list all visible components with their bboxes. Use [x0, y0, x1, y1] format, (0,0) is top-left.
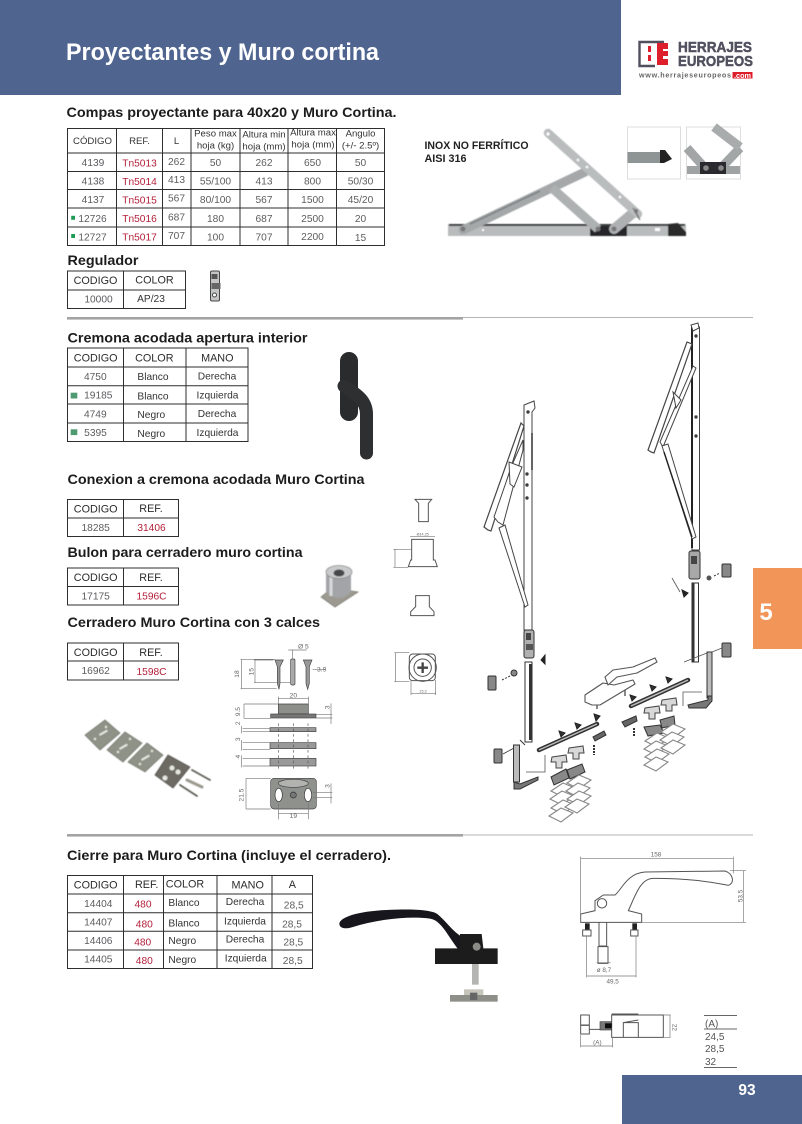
right spacer stacks	[644, 716, 685, 771]
table: compas proyectante: 687	[256, 214, 273, 225]
table: compas proyectante: 4137	[82, 195, 105, 206]
table: conexion	[68, 500, 178, 536]
table: compas proyectante: 100	[207, 232, 224, 244]
logo web address: www.herrajeseuropeos	[638, 70, 731, 80]
drawing: bolt dimensioned: Ø14.25	[417, 533, 429, 537]
table: compas proyectante: 567	[256, 195, 273, 206]
drawing: screws and pin	[234, 643, 327, 689]
logo wordmark: EUROPEOS	[678, 53, 753, 70]
table: bulon: 17175	[82, 592, 110, 602]
table: compas proyectante: 50	[210, 158, 221, 169]
photo inset: stay tip	[628, 127, 680, 179]
table: compas proyectante: 262	[168, 157, 185, 168]
table: cierre: 14407	[84, 917, 113, 928]
table: dimension A: 32	[705, 1057, 717, 1068]
logo wordmark	[678, 39, 753, 70]
table: compas proyectante: REF.	[129, 136, 150, 147]
table: dimension A	[704, 1016, 737, 1068]
icon: regulador part	[210, 271, 220, 301]
table: compas proyectante: 687	[168, 212, 185, 224]
drawing: bracket side: 9.5	[235, 707, 242, 716]
orange chapter tab	[753, 568, 802, 649]
left lower bar and bracket	[514, 662, 545, 789]
table: compas proyectante: 12727	[78, 233, 107, 244]
table: compas proyectante: Angulo	[346, 129, 375, 140]
dimensions: 53,5	[738, 889, 745, 902]
table: compas proyectante: 650	[304, 158, 321, 169]
table: cierre: Izquierda	[224, 916, 266, 927]
table: cremona: Blanco	[137, 372, 169, 383]
table: compas proyectante: 50/30	[348, 176, 374, 187]
drawing: bolt side	[415, 499, 432, 522]
drawing: spacers: 2	[235, 721, 242, 725]
drawing: bracket side	[235, 692, 332, 724]
drawing: screws and pin: Ø 5	[298, 643, 309, 650]
table: compas proyectante: 15	[355, 233, 366, 244]
divider	[67, 317, 753, 320]
table: compas proyectante: 262	[256, 158, 273, 169]
table: compas proyectante: hoja (mm)	[242, 141, 286, 152]
left spacer stacks	[549, 764, 591, 822]
technical drawing: side view	[581, 1014, 678, 1047]
table: dimension A: 24,5	[705, 1032, 725, 1043]
table: bulon: 1596C	[136, 592, 167, 602]
drawing: bracket top: 21.5	[238, 788, 245, 801]
table: cremona: COLOR	[135, 353, 174, 365]
table: cierre: Negro	[168, 936, 197, 947]
right lower bar and bracket	[672, 578, 731, 708]
photo: black window handle	[339, 910, 498, 1002]
table: cerradero: 16962	[82, 666, 110, 677]
drawing: spacers: 3	[235, 737, 242, 741]
logo: Herrajes Europeos	[638, 39, 753, 80]
table: cierre: 480	[134, 937, 152, 948]
table: compas proyectante: 12726	[78, 214, 107, 225]
drawing: bolt top view	[394, 653, 436, 695]
dimensions	[581, 852, 746, 985]
drawing: nut	[411, 596, 434, 616]
table: cierre: COLOR	[166, 879, 204, 891]
table: compas proyectante: 4139	[82, 158, 105, 169]
table: compas proyectante: 1500	[301, 195, 324, 206]
table: cremona	[68, 348, 248, 442]
table: compas proyectante: hoja (kg)	[197, 140, 234, 151]
table: compas proyectante: 707	[256, 232, 273, 244]
logo wordmark: HERRAJES	[678, 39, 752, 56]
table: cerradero	[68, 643, 178, 680]
table: cremona: MANO	[201, 353, 234, 365]
exploded drawing: curtain wall assemblies	[484, 323, 731, 822]
table: cremona: Derecha	[198, 409, 237, 420]
table: cierre: 28,5	[282, 919, 302, 930]
table: cerradero: 1598C	[136, 667, 167, 678]
table: conexion: 31406	[137, 523, 166, 534]
table: cierre: Blanco	[168, 918, 200, 929]
drawing: bracket top	[238, 778, 332, 820]
table: regulador: COLOR	[135, 274, 174, 286]
table: cremona: 5395	[84, 428, 107, 439]
dimensions: 158	[651, 852, 662, 859]
heading: bulon: Bulon para cerradero muro cortina	[68, 544, 303, 560]
photo inset: stay pivot	[686, 127, 740, 179]
table: compas proyectante: 2200	[301, 232, 324, 243]
table: compas proyectante: 413	[168, 175, 185, 186]
table: cremona: Blanco	[137, 392, 169, 403]
photo: compas stay	[448, 132, 686, 236]
table: cierre	[68, 876, 312, 968]
header band	[0, 0, 621, 95]
table: conexion: CODIGO	[74, 504, 118, 516]
heading: cerradero: Cerradero Muro Cortina con 3 calces	[68, 614, 320, 630]
table: cierre: MANO	[231, 879, 264, 891]
table: regulador: CODIGO	[74, 275, 117, 287]
page number: 93	[738, 1082, 756, 1099]
table: compas proyectante: 180	[207, 214, 224, 225]
table: compas proyectante: Tn5015	[122, 196, 157, 206]
table: dimension A: 28,5	[705, 1044, 725, 1055]
table: cierre: Izquierda	[225, 954, 267, 965]
table: cremona: 4749	[84, 409, 107, 420]
table: cerradero: CODIGO	[74, 647, 118, 659]
table: compas proyectante: 45/20	[348, 195, 374, 206]
table: compas proyectante: Tn5016	[122, 214, 157, 225]
table: compas proyectante	[68, 128, 384, 246]
photo: bulon	[321, 566, 358, 607]
table: compas proyectante: 4138	[82, 176, 105, 187]
left lock	[524, 630, 545, 664]
left stay assembly	[484, 401, 535, 630]
table: regulador: AP/23	[137, 294, 165, 305]
table: compas proyectante: Peso max	[194, 129, 237, 140]
table: cierre: 480	[134, 899, 152, 910]
drawing: bracket top: 3	[324, 784, 331, 788]
table: regulador: 10000	[84, 295, 113, 306]
drawing: bracket top: 19	[290, 813, 297, 820]
table: compas proyectante: hoja (mm)	[291, 140, 335, 151]
technical drawing: side view: 22	[671, 1024, 678, 1031]
table: bulon: REF.	[139, 572, 163, 584]
green availability markers	[71, 216, 75, 238]
table: cremona: Izquierda	[197, 428, 239, 439]
right strip	[622, 677, 688, 737]
table: bulon	[68, 568, 178, 605]
table: compas proyectante: 20	[355, 214, 366, 225]
table: cierre: 14405	[84, 954, 113, 965]
title: Proyectantes y Muro cortina	[66, 39, 380, 66]
table: cremona: 4750	[84, 372, 107, 383]
note: material: INOX NO FERRÍTICO	[424, 139, 529, 152]
drawing: bracket side: 3	[324, 705, 331, 709]
drawing: bracket side: 20	[290, 692, 297, 699]
table: cierre: 28,5	[284, 900, 304, 911]
heading: conexion: Conexion a cremona acodada Muro Cortina	[68, 471, 365, 487]
right lock	[689, 551, 731, 580]
left strip	[539, 714, 606, 768]
table: cierre: 14406	[84, 936, 113, 947]
right stay assembly	[648, 323, 700, 550]
note: material: AISI 316	[424, 153, 466, 165]
table: compas proyectante: 55/100	[200, 176, 231, 187]
drawing: cerradero dimensions	[234, 643, 332, 820]
table: compas proyectante: 413	[256, 176, 273, 187]
logo web address: .com	[734, 73, 751, 80]
table: cremona: Derecha	[198, 372, 237, 382]
icon: logo mark	[640, 42, 668, 66]
table: cierre: 480	[136, 919, 153, 930]
table: cierre: REF.	[135, 879, 158, 891]
divider	[67, 834, 753, 837]
table: dimension A: (A)	[705, 1019, 718, 1030]
drawing: spacers	[235, 721, 316, 770]
table: regulador	[68, 271, 186, 308]
table: cierre: Blanco	[168, 898, 200, 909]
heading: cierre: Cierre para Muro Cortina (incluye el cerradero).	[67, 847, 391, 863]
table: compas proyectante: Tn5017	[122, 233, 157, 244]
green availability markers	[71, 393, 77, 435]
table: cerradero: REF.	[139, 647, 163, 659]
note: material	[424, 139, 529, 165]
table: compas proyectante: Tn5013	[122, 158, 157, 170]
table: cremona: CODIGO	[74, 353, 118, 365]
drawing: screws and pin: 18	[234, 670, 241, 678]
exploded handle	[585, 658, 657, 709]
handle outline	[581, 871, 732, 963]
table: cierre: 28,5	[283, 937, 304, 948]
drawing: bolt top view: 15.3	[419, 689, 427, 693]
table: conexion: 18285	[82, 523, 110, 534]
table: cierre: Negro	[168, 955, 197, 966]
table: compas proyectante: 567	[168, 194, 185, 205]
table: cremona: Izquierda	[197, 391, 239, 402]
table: compas proyectante: Altura max	[290, 128, 336, 139]
chapter number: 5	[759, 599, 773, 626]
technical drawing: handle dimensions	[581, 852, 746, 985]
drawings: bulon dimensions	[393, 499, 437, 695]
table: compas proyectante: 50	[355, 158, 366, 169]
drawing: screws and pin: 3.9	[317, 666, 327, 673]
photo: plates and screws	[85, 720, 210, 796]
table: cierre: A	[289, 879, 297, 891]
table: compas proyectante: Tn5014	[122, 177, 157, 188]
table: compas proyectante: (+/- 2.5º)	[342, 140, 379, 152]
drawing: bolt dimensioned	[393, 533, 437, 567]
table: compas proyectante: 80/100	[200, 195, 231, 206]
table: compas proyectante: 800	[304, 176, 321, 187]
table: cierre: 480	[136, 956, 153, 967]
table: compas proyectante: 2500	[301, 214, 324, 225]
table: cremona: 19185	[84, 391, 113, 402]
table: compas proyectante: Altura min	[242, 130, 286, 141]
dimensions: ø 8,7	[597, 967, 612, 974]
table: conexion: REF.	[139, 503, 163, 515]
left wall pieces	[488, 670, 517, 763]
dimensions: 49,5	[606, 978, 619, 985]
page number tab	[622, 1075, 802, 1124]
table: cierre: 14404	[84, 899, 113, 910]
drawing: spacers: 4	[235, 755, 242, 759]
table: cierre: CODIGO	[74, 879, 118, 891]
drawing: screws and pin: 15	[248, 668, 255, 675]
table: bulon: CODIGO	[74, 572, 118, 584]
heading: regulador: Regulador	[68, 252, 139, 268]
table: cremona: Negro	[137, 429, 166, 440]
table: compas proyectante: 707	[168, 231, 185, 242]
table: compas proyectante: CÓDIGO	[73, 136, 112, 147]
table: cremona: Negro	[137, 410, 166, 421]
table: cierre: Derecha	[226, 934, 265, 945]
technical drawing: side view: (A)	[593, 1040, 602, 1047]
table: cierre: 28,5	[283, 956, 303, 967]
table: cierre: Derecha	[226, 897, 265, 908]
heading: cremona: Cremona acodada apertura interior	[68, 330, 308, 346]
photo: black cremona handle	[344, 361, 366, 453]
table: compas proyectante: L	[174, 136, 180, 147]
heading: compas proyectante: Compas proyectante para 40x20 y Muro Cortina.	[66, 104, 396, 120]
